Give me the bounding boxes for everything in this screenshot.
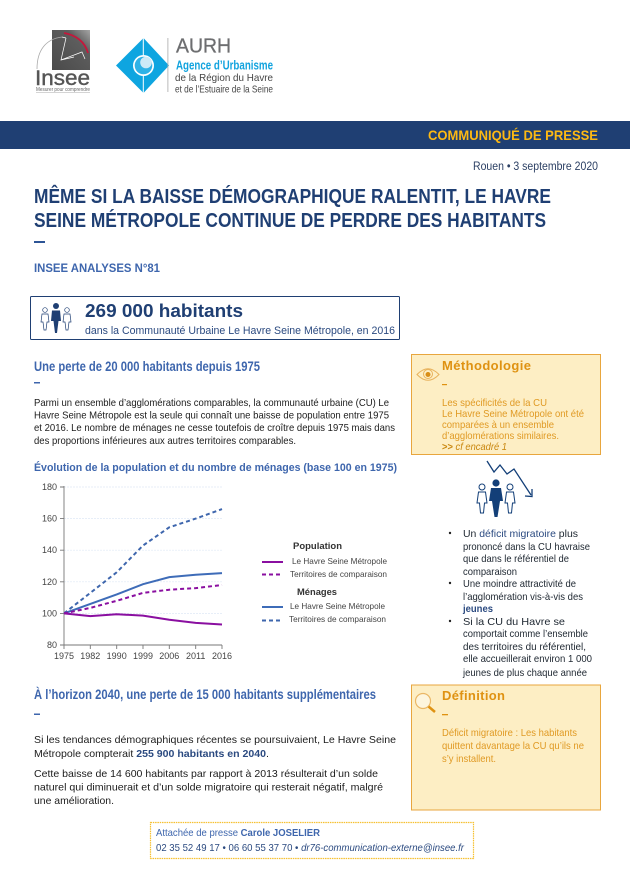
line chart: [42, 482, 232, 661]
title: [34, 184, 551, 243]
text block: projection: Cette baisse de 14 600 habitants par rapport à 2013 résulterait d’un solde: [34, 768, 378, 780]
text block: projection: naturel qui diminuerait et d’un solde migratoire qui resterait négatif, malgré: [34, 782, 383, 794]
icon: eye: [417, 369, 439, 380]
logo: AURH: Agence d’Urbanisme: [176, 58, 273, 72]
series: ménages comparaison: [64, 509, 222, 613]
panel: key figure: [30, 296, 400, 340]
chart legend: Territoires de comparaison: [290, 569, 387, 579]
line chart: 180: [42, 482, 57, 492]
line chart: 80: [47, 640, 57, 650]
chart legend: Ménages: [297, 587, 337, 598]
series: population comparaison: [64, 585, 222, 613]
panel: définition: Déficit migratoire : Les habitants: [442, 727, 577, 739]
chart legend: Le Havre Seine Métropole: [290, 601, 385, 611]
bullet list: migration: que dans le référentiel de: [463, 553, 569, 565]
panel: key figure: dans la Communauté Urbaine Le Havre Seine Métropole, en 2016: [85, 325, 395, 337]
panel: définition: s’y installent.: [442, 753, 496, 765]
bullet list: migration: comparaison: [463, 566, 517, 578]
text block: intro: [34, 397, 395, 447]
bullet list: migration: [449, 528, 592, 679]
text block: projection: Métropole compterait 255 900 habitants en 2040.: [34, 748, 269, 760]
chart legend: [262, 541, 387, 624]
panel: méthodologie: d’agglomérations similaires.: [442, 430, 559, 442]
panel: press contact: Attachée de presse Carole JOSELIER: [156, 827, 320, 839]
bullet list: migration: Si la CU du Havre se: [463, 616, 565, 628]
banner: communiqué de presse: [0, 121, 630, 149]
bullet list: migration: l’agglomération vis-à-vis des: [463, 591, 583, 603]
heading: perte depuis 1975: Une perte de 20 000 habitants depuis 1975: [34, 359, 260, 374]
logo: Insee: [35, 30, 90, 93]
banner: communiqué de presse: COMMUNIQUÉ DE PRESSE: [428, 127, 598, 143]
bullet list: migration: jeunes de plus chaque année: [462, 667, 587, 679]
panel: méthodologie: comparées à un ensemble: [442, 419, 554, 431]
panel: méthodologie: Méthodologie: [442, 358, 531, 373]
panel: méthodologie: >> cf encadré 1: [442, 441, 507, 453]
bullet list: migration: elle accueillerait environ 1 000: [463, 653, 592, 665]
text block: projection: [34, 734, 396, 807]
logo: AURH: et de l’Estuaire de la Seine: [175, 84, 273, 96]
chart legend: Le Havre Seine Métropole: [292, 556, 387, 566]
text block: intro: des proportions inférieures aux autres territoires comparables.: [34, 435, 296, 447]
series: ménages Le Havre: [64, 573, 222, 613]
chart legend: Population: [293, 541, 342, 552]
bullet list: migration: Un déficit migratoire plus: [463, 528, 578, 540]
panel: press contact: 02 35 52 49 17 • 06 60 55 37 70 • dr76-communication-externe@insee.fr: [156, 842, 464, 854]
chart title: Évolution de la population et du nombre de ménages (base 100 en 1975): [34, 461, 397, 474]
line chart: 2016: [212, 651, 232, 661]
logo: Insee: Mesurer pour comprendre: [36, 87, 90, 93]
title: SEINE MÉTROPOLE CONTINUE DE PERDRE DES HABITANTS: [34, 209, 546, 232]
panel: définition: Définition: [442, 688, 505, 703]
bullet list: migration: prononcé dans la CU havraise: [463, 541, 590, 553]
icon: people: [41, 303, 71, 333]
panel: méthodologie: Le Havre Seine Métropole ont été: [442, 408, 584, 420]
panel: press contact: [150, 822, 474, 858]
title: MÊME SI LA BAISSE DÉMOGRAPHIQUE RALENTIT, LE HAVRE: [34, 184, 551, 208]
panel: méthodologie: [412, 354, 600, 454]
line chart: 1975: [54, 651, 74, 661]
series: population Le Havre: [64, 613, 222, 624]
line chart: 2006: [159, 651, 179, 661]
chart legend: Territoires de comparaison: [289, 614, 386, 624]
icon: people with falling arrow: [477, 461, 532, 517]
line chart: 100: [42, 608, 57, 618]
subtitle: Insee Analyses: INSEE ANALYSES N°81: [34, 261, 160, 275]
icon: magnifier: [416, 694, 435, 712]
panel: méthodologie: Les spécificités de la CU: [442, 397, 547, 409]
logo: AURH: [116, 36, 273, 96]
text block: intro: Havre Seine Métropole est la seule qui connaît une baisse de population entre 1975: [34, 410, 389, 422]
line chart: 140: [42, 545, 57, 555]
line chart: 1990: [107, 651, 127, 661]
panel: key figure: 269 000 habitants: [85, 300, 243, 321]
bullet list: migration: Une moindre attractivité de: [463, 578, 576, 590]
text block: intro: Parmi un ensemble d’agglomérations comparables, la communauté urbaine (CU) Le: [34, 397, 389, 409]
logo: AURH: AURH: [176, 36, 231, 58]
line chart: 1982: [80, 651, 100, 661]
date line: Rouen • 3 septembre 2020: [473, 161, 598, 173]
line chart: 120: [42, 577, 57, 587]
heading: horizon 2040: À l’horizon 2040, une perte de 15 000 habitants supplémentaires: [34, 687, 376, 702]
panel: définition: quittent davantage la CU qu’ils ne: [442, 740, 584, 752]
logo: Insee: Insee: [35, 67, 90, 90]
line chart: 160: [42, 514, 57, 524]
logo: AURH: de la Région du Havre: [175, 72, 273, 84]
panel: définition: [412, 685, 600, 810]
line chart: 1999: [133, 651, 153, 661]
bullet list: migration: comportait comme l’ensemble: [463, 628, 588, 640]
bullet list: migration: jeunes: [462, 603, 493, 615]
text block: projection: Si les tendances démographiques récentes se poursuivaient, Le Havre Seine: [34, 734, 396, 746]
text block: projection: une amélioration.: [34, 795, 114, 807]
text block: intro: et 2016. Le nombre de ménages ne cesse toutefois de croître depuis 1975 mais dans: [34, 422, 395, 434]
bullet list: migration: des territoires du référentiel,: [463, 641, 586, 653]
line chart: 2011: [186, 651, 205, 661]
